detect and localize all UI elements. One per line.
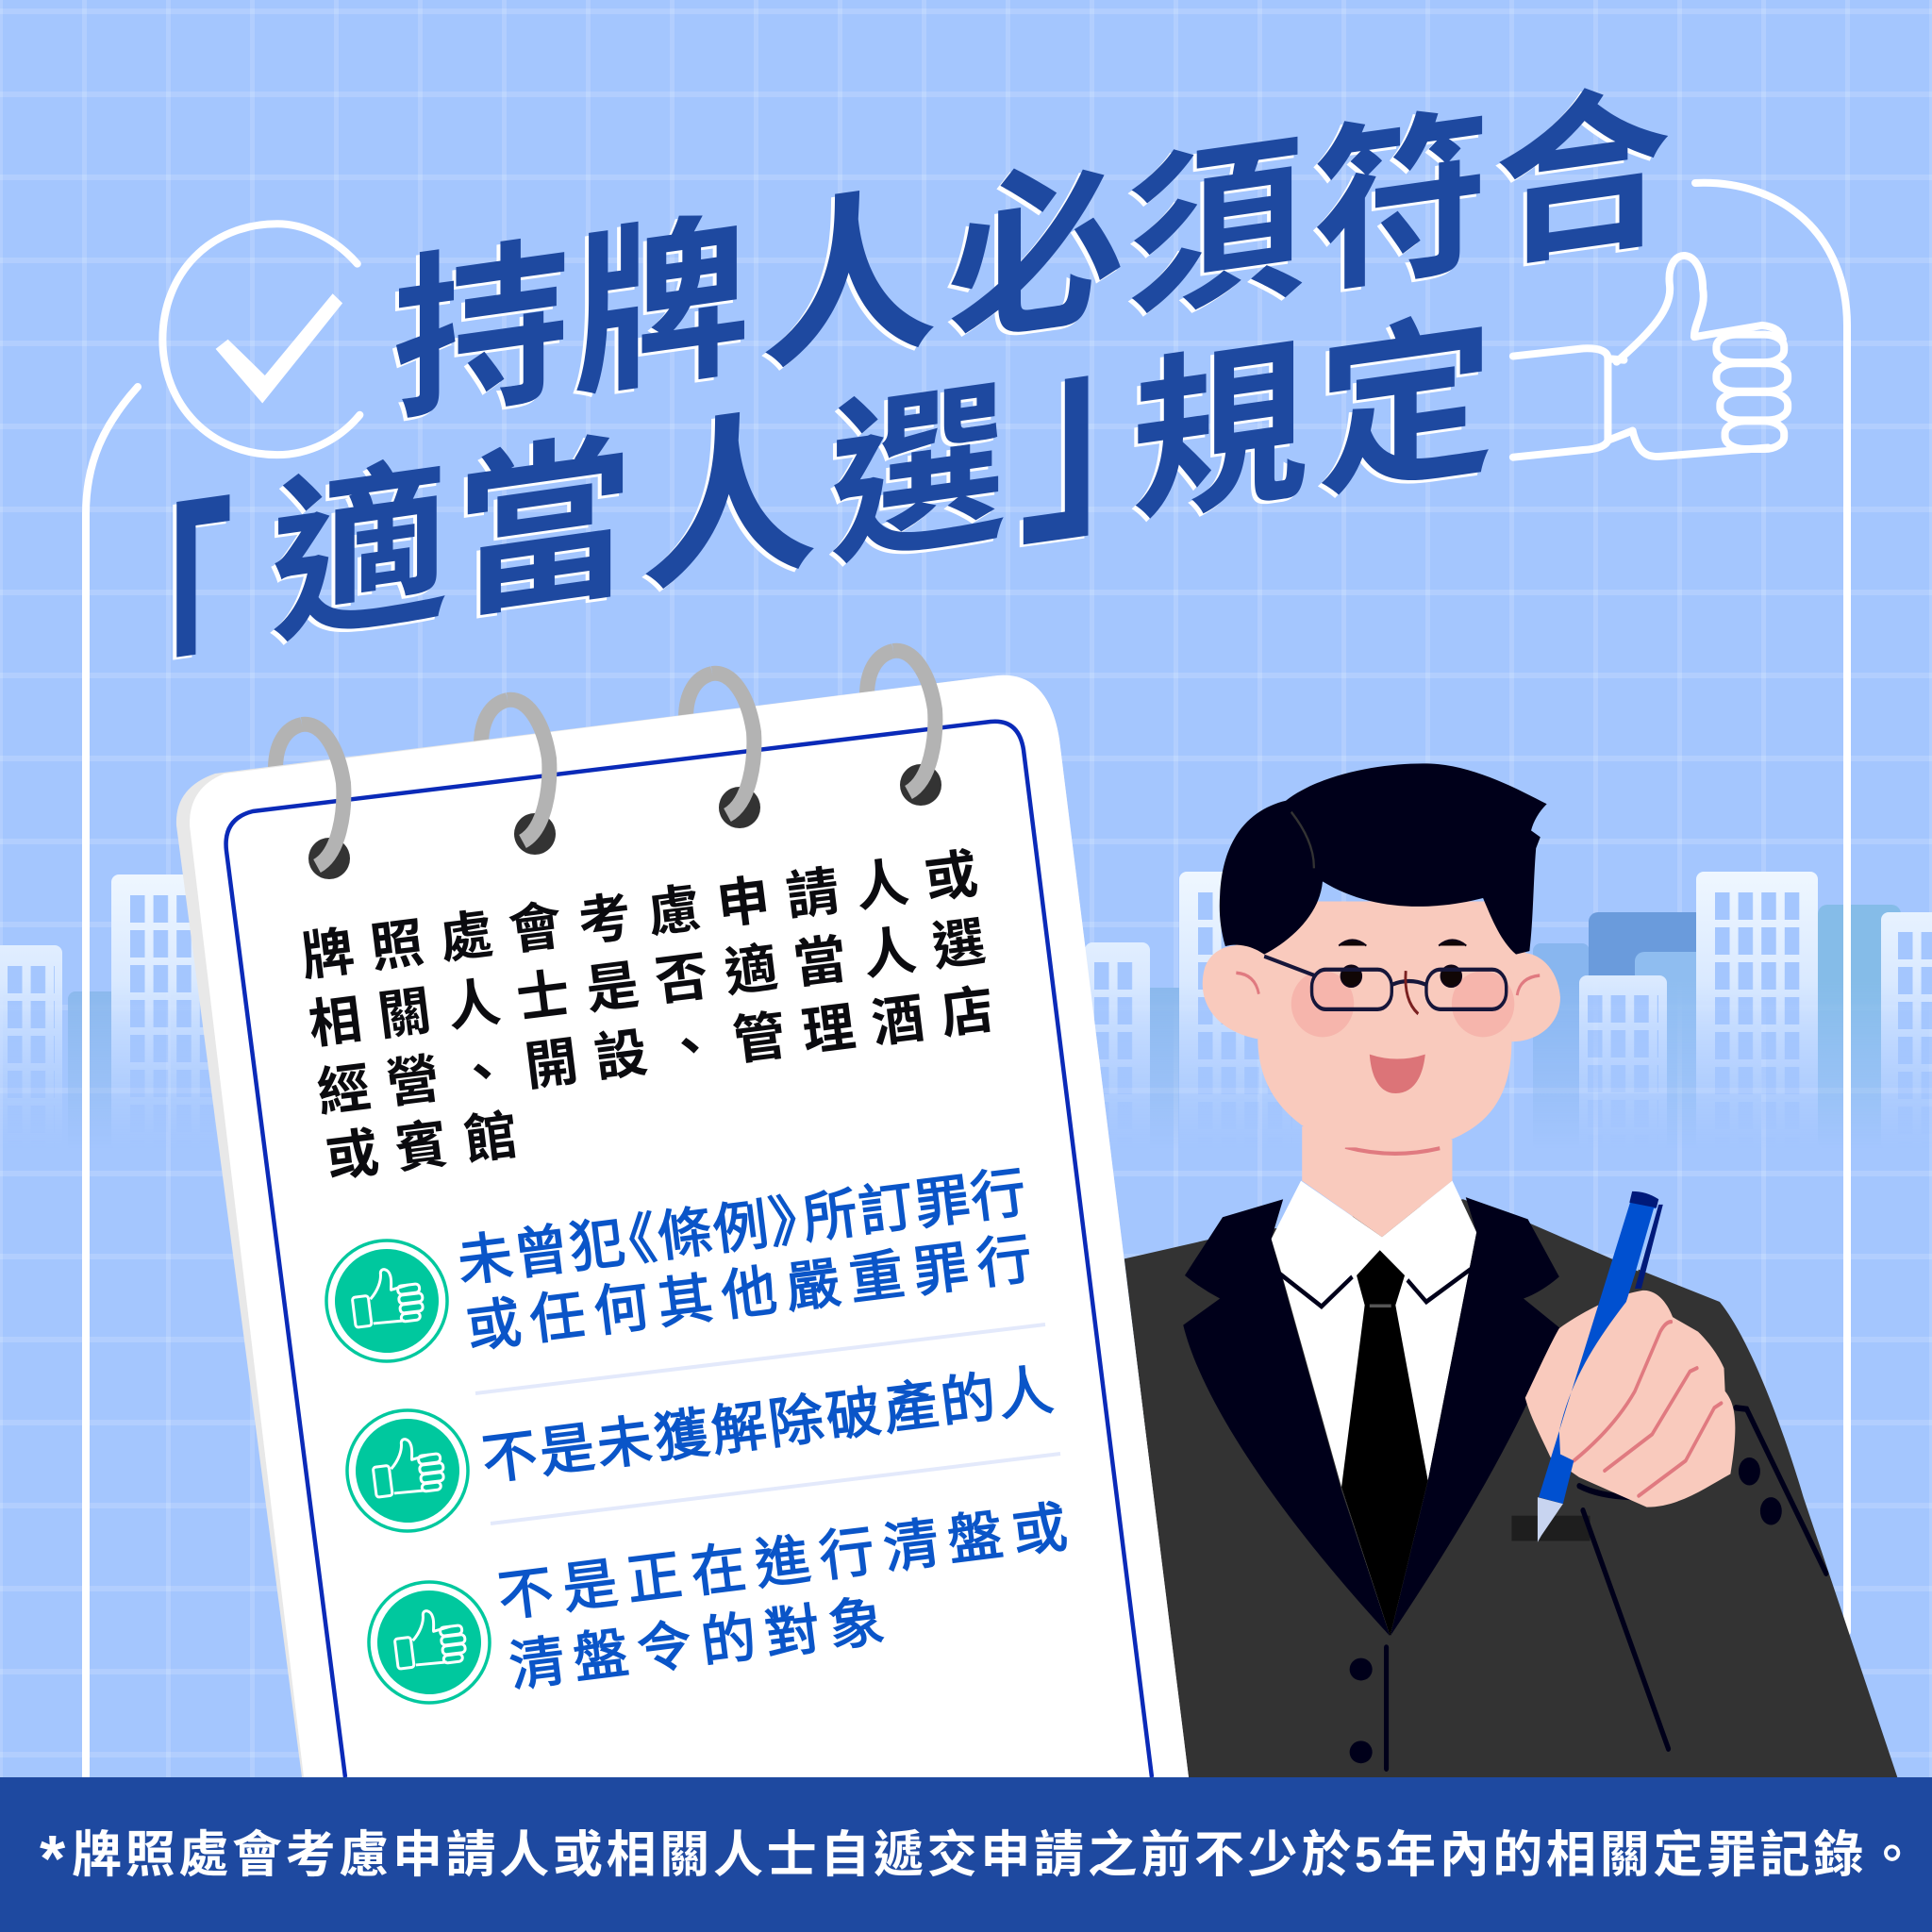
footnote: 牌照處會考慮申請人或相關人士自遞交申請之前不少於5年內的相關定罪記錄。 <box>72 1827 1917 1883</box>
badge 3 <box>362 1575 496 1709</box>
title line 2: 「 <box>75 482 234 775</box>
pen <box>1635 1205 1663 1289</box>
city skyline <box>0 872 1932 1115</box>
item 3 text <box>495 1495 1080 1698</box>
title line 2: 」 <box>1014 272 1209 578</box>
title <box>71 68 1672 778</box>
notebook page <box>176 675 1189 1777</box>
item 2 text: 不是未獲解除破產的人 <box>479 1359 1059 1491</box>
businessman <box>1124 763 1904 1795</box>
divider <box>475 1324 1045 1393</box>
collar lines <box>1279 1269 1471 1307</box>
title line 2: 適當人選 <box>267 369 1003 670</box>
item 1 text <box>455 1161 1045 1359</box>
badge 1 <box>320 1234 454 1368</box>
title line 1: 持牌人必須符合 <box>389 71 1668 448</box>
item 3 text: 清盤令的對象 <box>507 1590 897 1698</box>
icon: thumbs up outline <box>1513 256 1788 458</box>
hand <box>1525 1291 1735 1507</box>
item 3 text: 不是正在進行清盤或 <box>495 1495 1080 1628</box>
title line 2: 適當人選 <box>271 365 1007 667</box>
face <box>1225 901 1533 1148</box>
shirt <box>1272 1181 1476 1636</box>
item 1 text: 未曾犯《條例》所訂罪行 <box>455 1161 1031 1293</box>
ears <box>1203 945 1560 1041</box>
binding rings back part <box>275 651 893 802</box>
lapels <box>1183 1197 1560 1636</box>
jacket <box>1124 1199 1904 1795</box>
title line 1: 持牌人必須符合 <box>392 68 1672 445</box>
cheeks <box>1291 971 1514 1037</box>
item 1 text: 或任何其他嚴重罪行 <box>463 1227 1045 1359</box>
intro text: 或賓館 <box>323 1103 538 1188</box>
mouth <box>1370 1055 1425 1093</box>
intro text <box>298 841 1014 1188</box>
title line 2: 」 <box>1018 269 1213 575</box>
title line 2 <box>71 269 1494 778</box>
title line 2: 規定 <box>1127 301 1491 550</box>
neck <box>1302 1126 1452 1237</box>
intro text: 相關人士是否適當人選 <box>306 909 1006 1055</box>
chin line <box>1345 1147 1440 1154</box>
divider <box>491 1454 1060 1524</box>
pocket and sleeve details <box>1511 1516 1590 1541</box>
brows and eyes <box>1339 941 1466 987</box>
notebook inner border <box>226 722 1152 1777</box>
intro text: 牌照處會考慮申請人或 <box>298 841 998 987</box>
title line 2: 規定 <box>1131 297 1494 546</box>
binding rings front part <box>302 651 941 879</box>
footnote: * <box>40 1822 66 1895</box>
intro text: 經營、開設、管理酒店 <box>314 977 1014 1123</box>
white frame line <box>86 183 1847 1783</box>
footer bar <box>0 1777 1932 1932</box>
badge 2 <box>341 1404 475 1538</box>
icon: check mark in circle <box>162 224 359 455</box>
tie <box>1341 1250 1428 1636</box>
title line 2: 「 <box>71 485 230 778</box>
glasses <box>1264 957 1507 1009</box>
hair <box>1220 763 1547 955</box>
